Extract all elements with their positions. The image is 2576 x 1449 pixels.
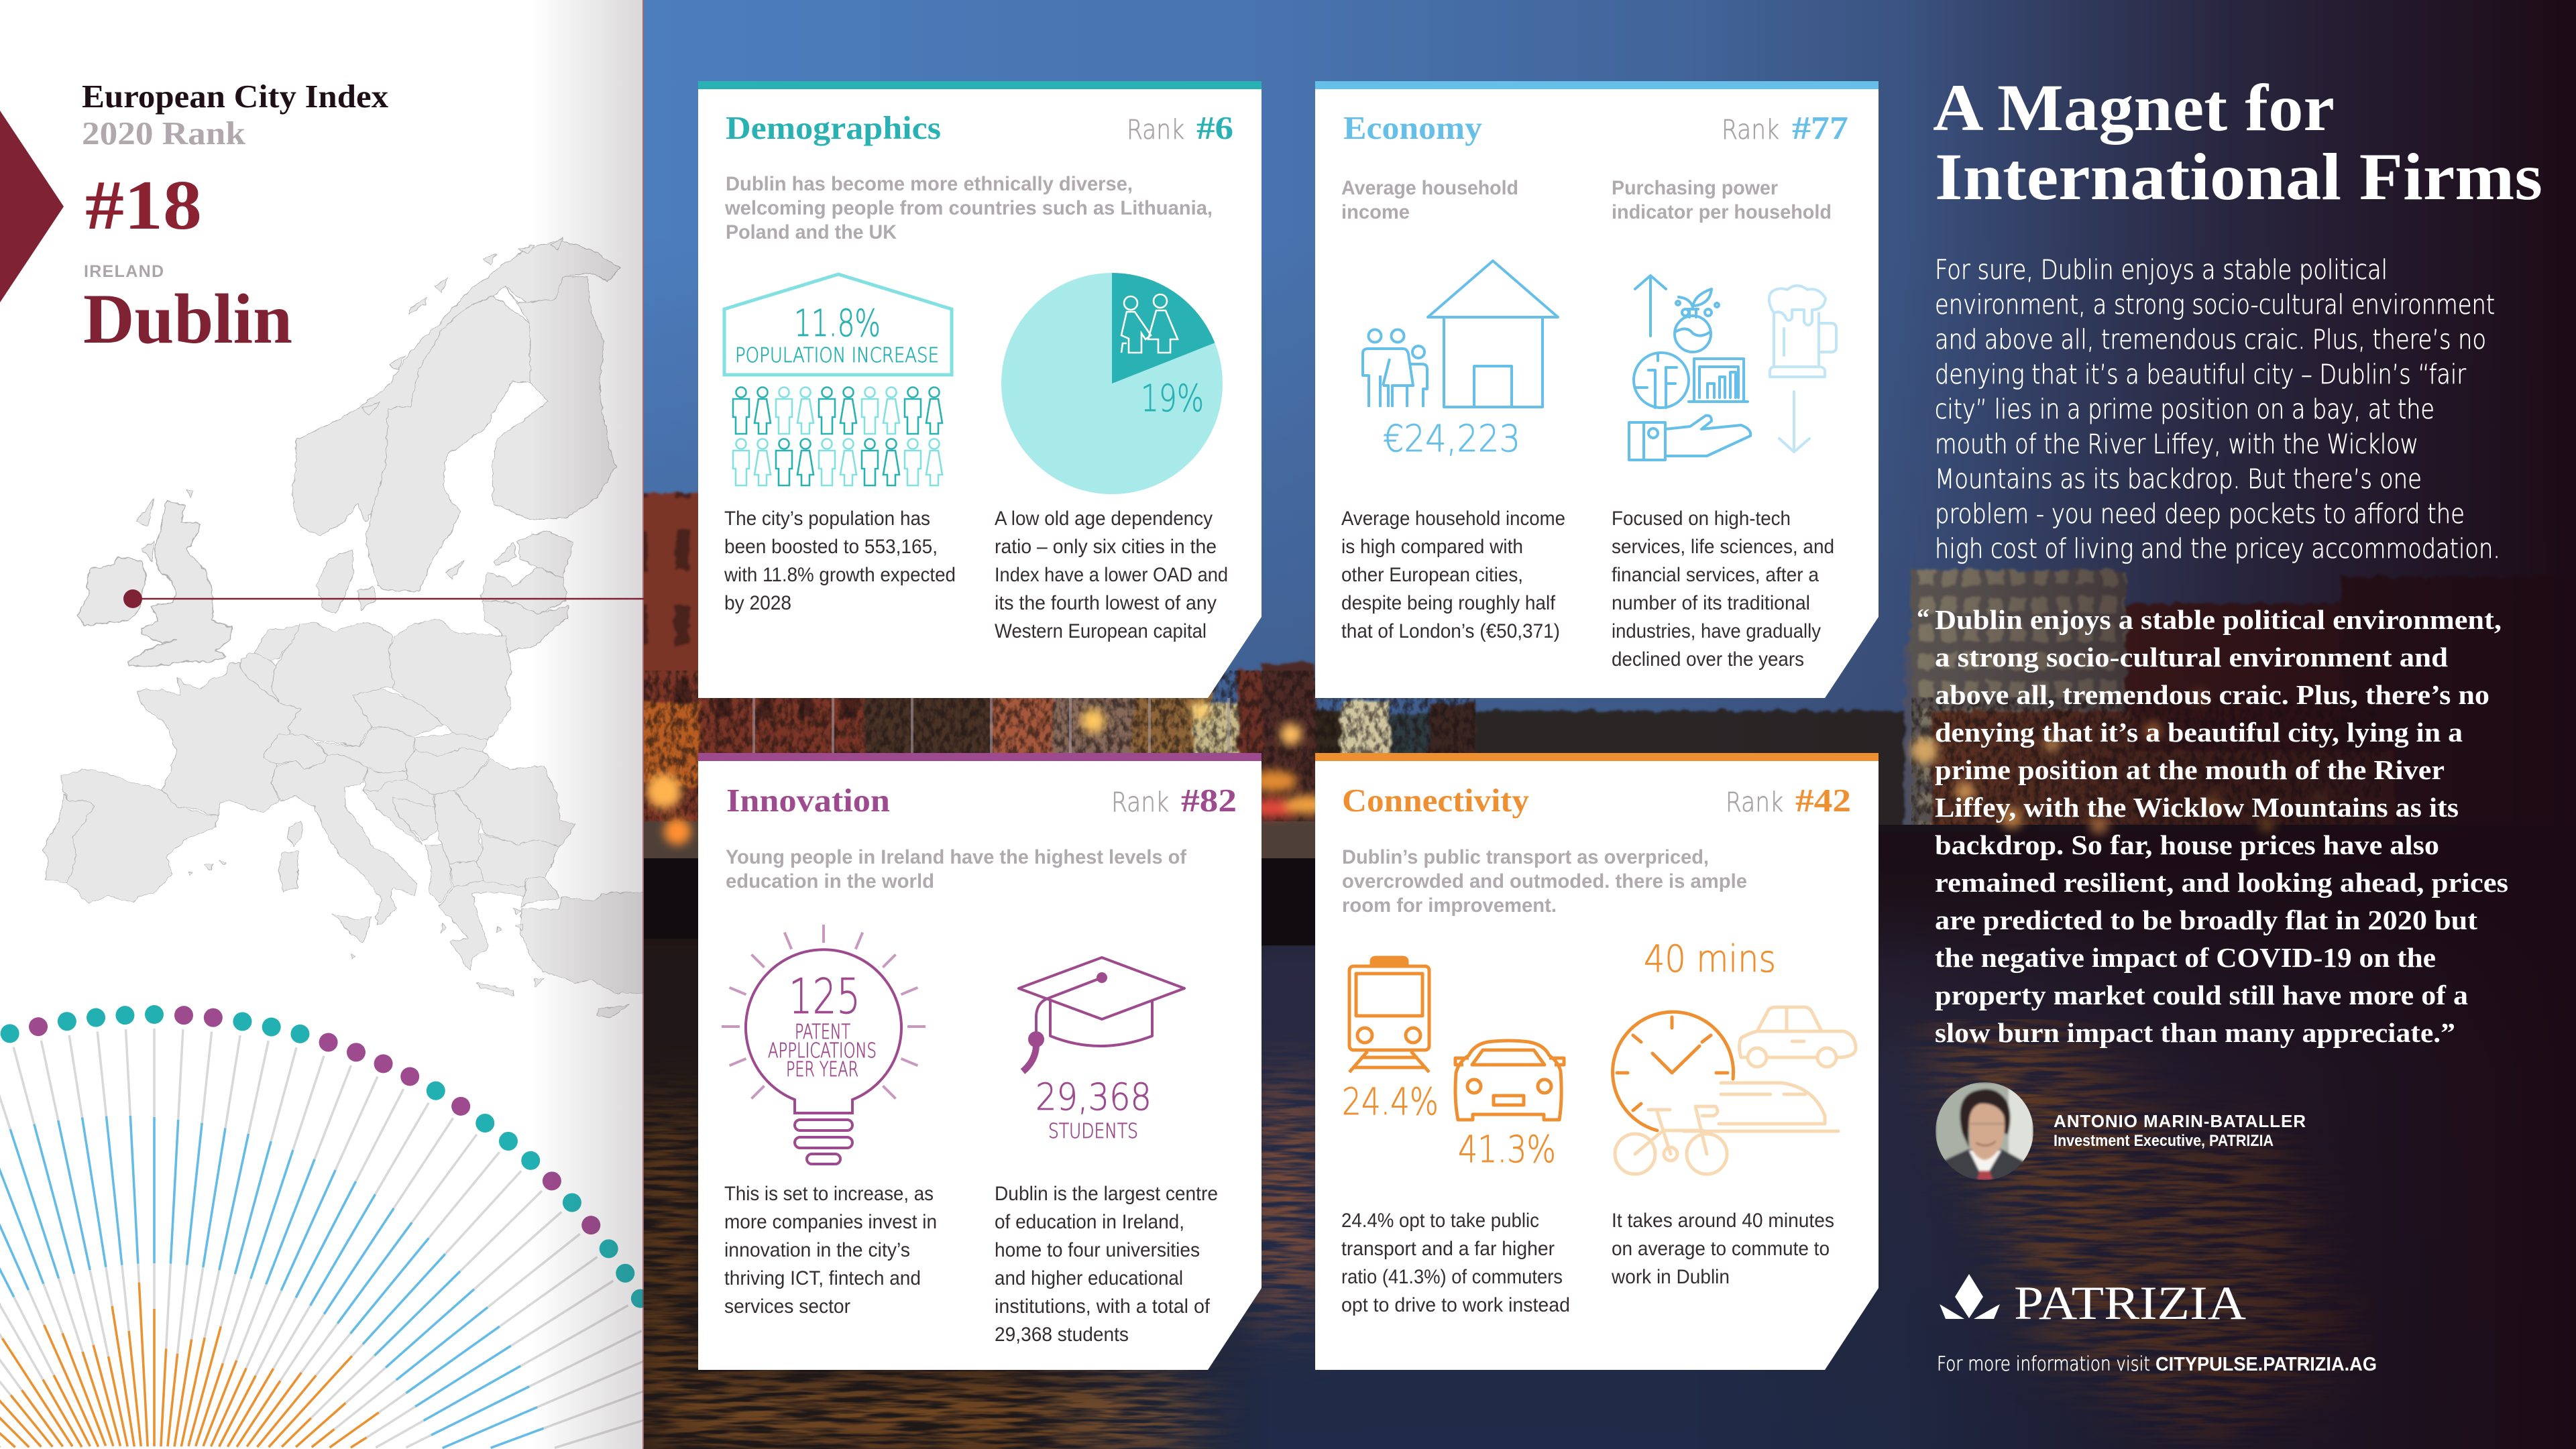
subheading: overcrowded and outmoded. there is ample (1342, 870, 1747, 892)
logo: PATRIZIA: PATRIZIA (2014, 1277, 2246, 1330)
value: commute time: 40 mins (1644, 937, 1776, 980)
speaker name and role: Investment Executive, PATRIZIA (2054, 1132, 2274, 1150)
body text right (995, 508, 1228, 642)
body text right: Focused on high-tech (1612, 508, 1791, 530)
background photo: Dublin river at dusk (634, 0, 2576, 1449)
heading: 2020 Rank: 2020 Rank (82, 115, 246, 152)
rank: #77 (1792, 109, 1848, 146)
body text right: industries, have gradually (1612, 620, 1821, 642)
body text right: of education in Ireland, (995, 1211, 1184, 1233)
icon: train (1349, 958, 1429, 1072)
icon: car (1455, 1041, 1564, 1120)
portrait (1936, 1082, 2033, 1180)
radial dot and ray chart (0, 1005, 681, 1449)
body text left: by 2028 (724, 592, 791, 614)
body text right: services, life sciences, and (1612, 536, 1834, 558)
speaker name and role (2054, 1111, 2306, 1150)
subheading: Poland and the UK (726, 221, 897, 243)
article paragraph: and above all, tremendous craic. Plus, there’s no (1935, 325, 2486, 355)
body text left: been boosted to 553,165, (724, 536, 938, 558)
subheading right: indicator per household (1612, 201, 1832, 223)
subheading left: income (1341, 201, 1410, 223)
main title: A Magnet for (1933, 70, 2335, 145)
body text left: The city’s population has (724, 508, 930, 530)
subheading: Young people in Ireland have the highest levels of (726, 846, 1187, 868)
body text right: 29,368 students (995, 1324, 1129, 1346)
pie chart: 19% old age dependency (1001, 273, 1223, 494)
map of Europe (43, 238, 657, 1017)
article paragraph: Mountains as its backdrop. But there’s one (1935, 464, 2422, 495)
body text right: Western European capital (995, 620, 1207, 642)
body text right: financial services, after a (1612, 564, 1819, 586)
website link text: For more information visit (1937, 1352, 2150, 1375)
subheading: room for improvement. (1342, 894, 1557, 917)
body text left: that of London’s (€50,371) (1341, 620, 1560, 642)
subheading: education in the world (726, 870, 934, 892)
pull quote: Liffey, with the Wicklow Mountains as its (1935, 792, 2459, 823)
body text right: on average to commute to (1612, 1238, 1830, 1260)
city name: Dublin (83, 280, 292, 358)
article paragraph: problem - you need deep pockets to afford the (1935, 499, 2465, 530)
subheading (726, 846, 1187, 892)
body text right: institutions, with a total of (995, 1295, 1211, 1318)
icon: rising high-tech sectors (1629, 276, 1750, 460)
body text left: ratio (41.3%) of commuters (1341, 1266, 1563, 1288)
population house graphic (724, 274, 952, 375)
subheading: welcoming people from countries such as Lithuania, (724, 197, 1213, 219)
rank: Rank (1111, 787, 1169, 818)
overall rank: #18 (85, 166, 202, 244)
body text right: declined over the years (1612, 648, 1804, 671)
value: students: STUDENTS (1048, 1120, 1138, 1143)
rank (1722, 109, 1848, 146)
speaker name and role: ANTONIO MARIN-BATALLER (2054, 1111, 2306, 1131)
icon: graduation cap (1019, 958, 1184, 1071)
icon: light bulb with patent count: PATENT (795, 1021, 850, 1044)
body text left: with 11.8% growth expected (724, 564, 956, 586)
website link text: CITYPULSE.PATRIZIA.AG (2155, 1354, 2377, 1375)
pull quote: Dublin enjoys a stable political environment, (1935, 604, 2502, 635)
people icons (733, 388, 942, 485)
icon: light bulb with patent count (722, 925, 926, 1164)
pull quote: prime position at the mouth of the River (1935, 754, 2445, 785)
panel: left white map column (0, 0, 681, 1449)
body text left: opt to drive to work instead (1341, 1294, 1570, 1316)
panel: right article column (1917, 70, 2542, 1375)
body text right (1611, 1210, 1834, 1288)
pull quote (1917, 604, 2508, 1048)
map marker: Dublin location and leader line (123, 589, 644, 608)
value: students: 29,368 (1035, 1076, 1152, 1118)
rank (1111, 782, 1237, 819)
value: public transport share: 24.4% (1342, 1080, 1439, 1123)
rank: #42 (1795, 782, 1851, 819)
article paragraph: denying that it’s a beautiful city – Dublin’s “fair (1935, 359, 2466, 390)
rank: Rank (1127, 115, 1184, 146)
heading: European City Index: European City Index (82, 78, 389, 115)
pull quote: remained resilient, and looking ahead, prices (1935, 867, 2508, 898)
rank: Rank (1722, 115, 1779, 146)
body text right: A low old age dependency (995, 508, 1213, 530)
panel: innovation card (698, 753, 1262, 1370)
body text left: thriving ICT, fintech and (724, 1267, 921, 1289)
body text right: home to four universities (995, 1239, 1200, 1261)
main title: International Firms (1935, 139, 2542, 214)
article paragraph: For sure, Dublin enjoys a stable political (1935, 255, 2388, 286)
population house graphic: POPULATION INCREASE (735, 344, 939, 367)
body text left: 24.4% opt to take public (1341, 1210, 1539, 1232)
subheading: Dublin has become more ethnically diverse, (726, 173, 1133, 195)
body text left: services sector (724, 1295, 850, 1318)
body text left: more companies invest in (724, 1211, 937, 1233)
body text left: is high compared with (1341, 536, 1523, 558)
pull quote: above all, tremendous craic. Plus, there’s no (1935, 679, 2489, 710)
population house graphic: 11.8% (794, 302, 881, 345)
panel: connectivity card (1315, 753, 1879, 1370)
body text right (995, 1183, 1218, 1346)
value: students (1035, 1076, 1152, 1143)
rank (1127, 109, 1233, 146)
body text right: ratio – only six cities in the (995, 536, 1217, 558)
pull quote: property market could still have more of a (1935, 980, 2468, 1010)
pull quote: denying that it’s a beautiful city, lying in a (1935, 717, 2463, 748)
icon: light bulb with patent count: APPLICATIONS (768, 1039, 877, 1063)
body text right: and higher educational (995, 1267, 1183, 1289)
article paragraph: mouth of the River Liffey, with the Wicklow (1935, 429, 2418, 460)
article paragraph: city” lies in a prime position on a bay, at the (1935, 394, 2434, 425)
panel: demographics card (698, 81, 1262, 698)
icon: light bulb with patent count: PER YEAR (786, 1058, 858, 1082)
subheading right (1612, 177, 1832, 223)
rank: #6 (1196, 109, 1233, 146)
subheading left (1341, 177, 1518, 223)
rank: #82 (1181, 782, 1237, 819)
value: household income: €24,223 (1383, 417, 1520, 460)
body text left: other European cities, (1341, 564, 1523, 586)
pull quote: are predicted to be broadly flat in 2020 but (1935, 905, 2477, 935)
panel: economy card (1315, 81, 1879, 698)
icon: clock with car, train and bike (1613, 1007, 1856, 1174)
heading: Economy: Economy (1343, 109, 1483, 146)
subheading: Dublin’s public transport as overpriced, (1342, 846, 1709, 868)
icon: pointer triangle (0, 111, 64, 302)
pull quote: the negative impact of COVID-19 on the (1935, 942, 2436, 973)
heading: Connectivity: Connectivity (1342, 782, 1530, 819)
body text left: Average household income (1341, 508, 1565, 530)
body text right: work in Dublin (1611, 1266, 1730, 1288)
rank (1726, 782, 1851, 819)
pull quote: backdrop. So far, house prices have also (1935, 829, 2439, 860)
article paragraph (1935, 255, 2500, 565)
subheading left: Average household (1341, 177, 1518, 199)
body text left (1341, 508, 1565, 642)
body text right: its the fourth lowest of any (995, 592, 1217, 614)
heading: Innovation: Innovation (726, 782, 890, 819)
body text left: innovation in the city’s (724, 1239, 910, 1261)
body text right: Dublin is the largest centre (995, 1183, 1218, 1205)
logo: PATRIZIA (1940, 1274, 2246, 1330)
subheading (724, 173, 1213, 243)
pull quote: “ (1917, 604, 1929, 632)
icon: light bulb with patent count: 125 (789, 968, 860, 1025)
body text left (1341, 1210, 1570, 1316)
heading: Demographics: Demographics (726, 109, 941, 146)
pull quote: a strong socio-cultural environment and (1935, 642, 2448, 673)
body text right: Index have a lower OAD and (995, 564, 1228, 586)
country label: IRELAND (84, 262, 164, 281)
body text right (1612, 508, 1834, 671)
pie chart: 19% old age dependency: 19% (1141, 377, 1204, 420)
website link text (1937, 1352, 2377, 1375)
body text left (724, 508, 956, 614)
body text right: It takes around 40 minutes (1612, 1210, 1834, 1232)
icon: family and house (1363, 261, 1558, 407)
rank: Rank (1726, 787, 1783, 818)
body text right: number of its traditional (1612, 592, 1810, 614)
body text left: This is set to increase, as (724, 1183, 934, 1205)
icon: declining traditional industries (1769, 286, 1836, 452)
subheading right: Purchasing power (1612, 177, 1778, 199)
value: car share: 41.3% (1458, 1128, 1556, 1171)
subheading (1342, 846, 1747, 917)
pull quote: slow burn impact than many appreciate.” (1935, 1017, 2455, 1048)
body text left: transport and a far higher (1341, 1238, 1555, 1260)
body text left: despite being roughly half (1341, 592, 1556, 614)
body text left (724, 1183, 937, 1318)
main title (1933, 70, 2542, 214)
